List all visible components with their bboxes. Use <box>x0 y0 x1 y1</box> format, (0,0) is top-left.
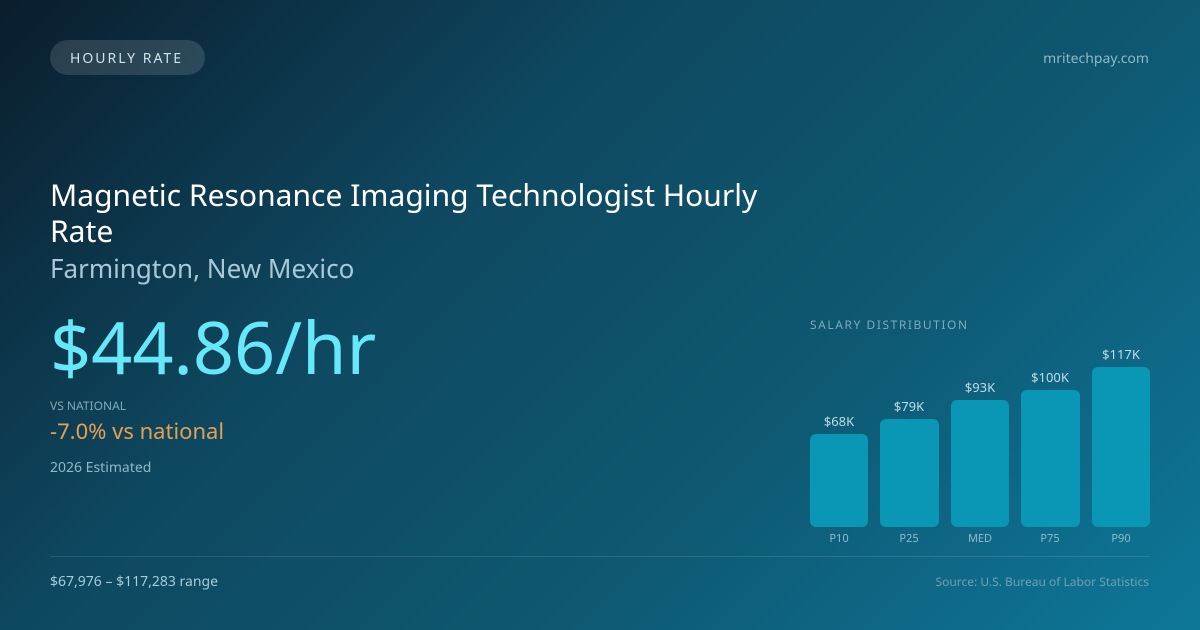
value: P90: $117K <box>1102 345 1140 363</box>
axis label: P90: P90 <box>1111 531 1131 546</box>
bar: P10 <box>810 434 868 527</box>
bar: median <box>951 400 1009 527</box>
bar: P75 <box>1021 390 1080 527</box>
badge: hourly rate <box>50 40 205 75</box>
year note: 2026 Estimated <box>50 458 151 477</box>
site name: mritechpay.com <box>1043 49 1149 68</box>
title: Magnetic Resonance Imaging Technologist Hourly Rate <box>50 174 757 251</box>
bar: P90 <box>1092 367 1150 527</box>
axis label: P10: P10 <box>829 531 849 546</box>
label: vs national: VS NATIONAL <box>50 397 126 414</box>
chart heading: SALARY DISTRIBUTION <box>810 316 969 333</box>
headline hourly figure: $44.86/hr <box>50 298 376 396</box>
salary range: $67,976 – $117,283 range <box>50 572 218 591</box>
value: median: $93K <box>965 378 995 396</box>
bar: P25 <box>880 419 939 527</box>
subtitle: location: Farmington, New Mexico <box>50 250 354 286</box>
badge label: HOURLY RATE <box>70 49 183 68</box>
value: P75: $100K <box>1031 368 1069 386</box>
comparison value: -7.0% vs national <box>50 416 224 446</box>
value: P25: $79K <box>894 397 924 415</box>
source note: Source: U.S. Bureau of Labor Statistics <box>936 573 1149 590</box>
value: P10: $68K <box>824 412 854 430</box>
axis label: P75: P75 <box>1040 531 1060 546</box>
axis label: P25: P25 <box>899 531 919 546</box>
axis label: median: MED <box>968 531 992 546</box>
